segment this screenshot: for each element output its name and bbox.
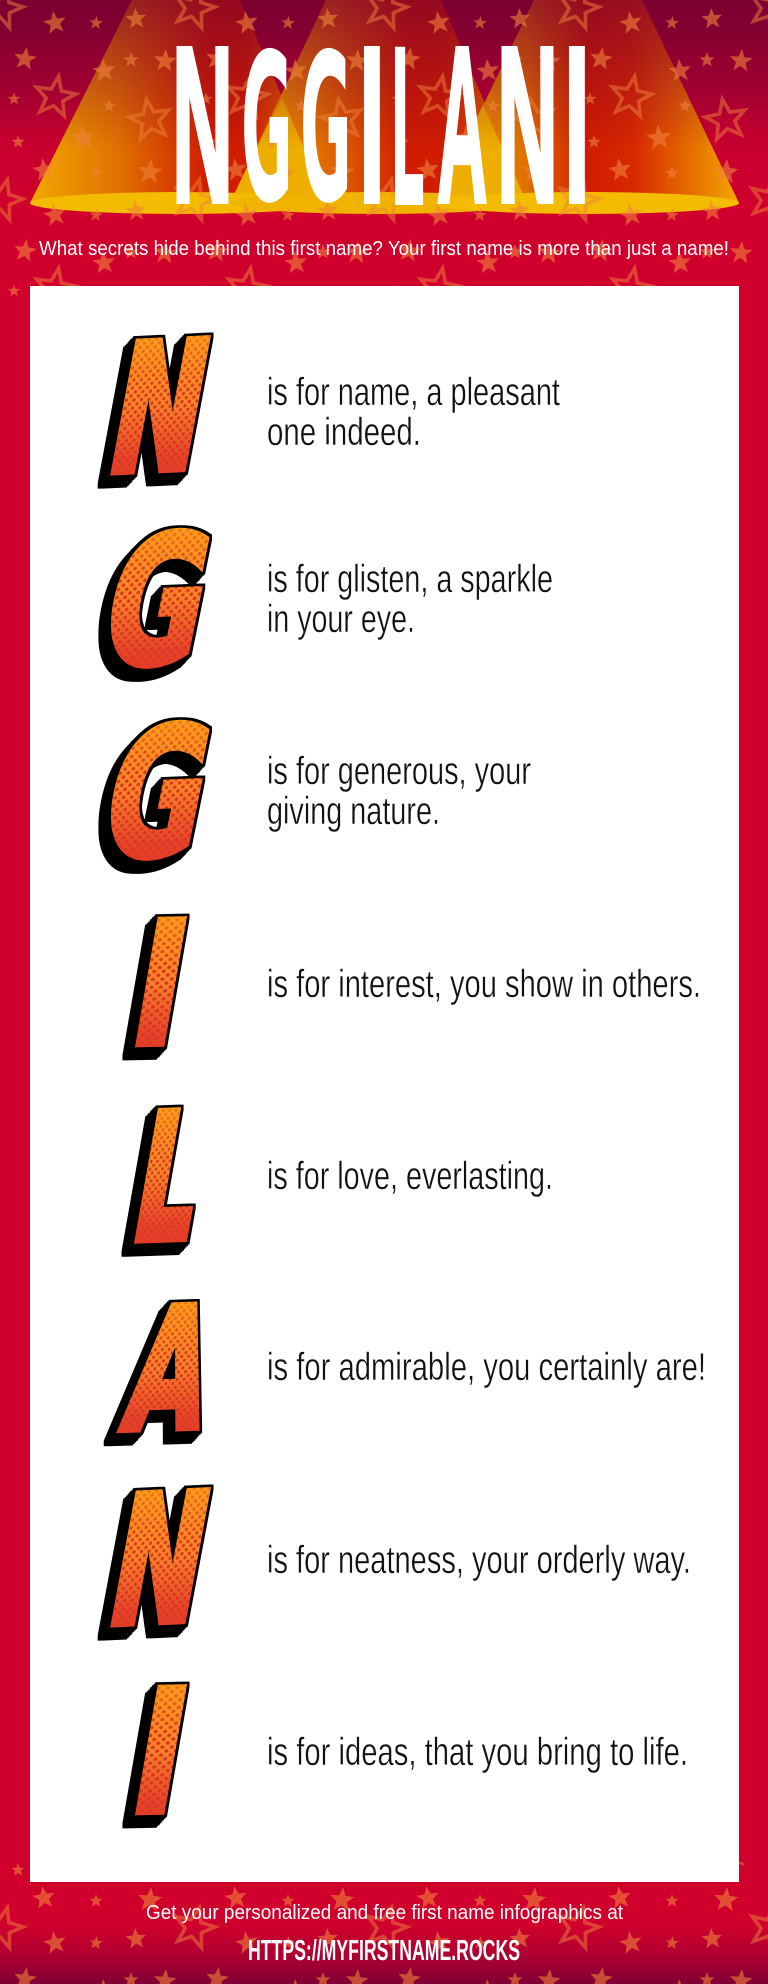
letter N: N (96, 304, 224, 513)
title: N (172, 1, 232, 248)
title: I (564, 1, 589, 248)
text: glisten (267, 558, 553, 641)
letter L: L (123, 1079, 215, 1279)
letter I: I (118, 1652, 203, 1854)
letter G: G (89, 496, 227, 707)
text: name: is for name, a pleasant (267, 371, 560, 414)
subtitle: What secrets hide behind this first name? Your first name is more than just a name! (39, 238, 729, 260)
text: generous (267, 750, 531, 833)
letter I: I (118, 884, 203, 1086)
text: glisten: in your eye. (267, 598, 415, 641)
panel: name letters (30, 286, 739, 1882)
title: G (300, 11, 352, 249)
letter G: G (89, 688, 227, 899)
letter N: N (96, 1456, 224, 1665)
text: name (267, 371, 560, 454)
footer url: HTTPS://MYFIRSTNAME.ROCKS (248, 1935, 520, 1967)
title: I (359, 1, 385, 248)
letter A: A (112, 1271, 229, 1468)
stars bottom (0, 1862, 768, 1984)
text: glisten: is for glisten, a sparkle (267, 558, 553, 601)
title: L (390, 5, 425, 257)
text: name: one indeed. (267, 411, 421, 454)
text: love: is for love, everlasting. (267, 1155, 553, 1198)
stars top (0, 0, 768, 300)
spotlights (0, 0, 768, 214)
title: N (496, 1, 557, 248)
footer line: Get your personalized and free first name infographics at (146, 1902, 623, 1924)
text: generous: giving nature. (267, 790, 440, 833)
title: A (437, 1, 487, 248)
title: G (240, 11, 292, 249)
text: generous: is for generous, your (267, 750, 531, 793)
title (172, 1, 589, 257)
